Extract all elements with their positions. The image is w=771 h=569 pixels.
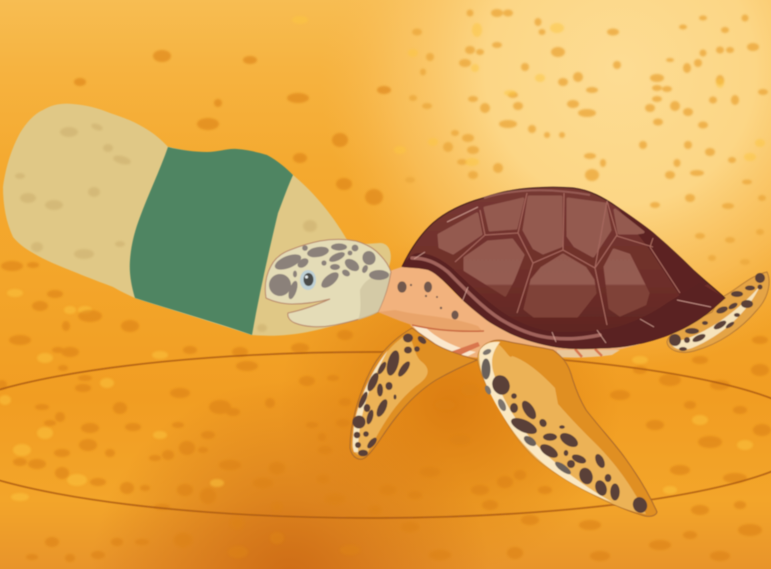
plastic bottle <box>3 104 391 336</box>
head shading <box>358 273 390 320</box>
sea turtle <box>265 187 769 516</box>
front right flipper <box>478 340 657 516</box>
rear flipper <box>667 272 769 352</box>
bottle faint blotches showing through <box>15 122 317 332</box>
eye <box>300 270 316 290</box>
neck skin <box>378 267 490 331</box>
scutes: shell plates <box>439 197 648 316</box>
seams between scutes <box>455 193 680 325</box>
ground ring: large ellipse line on the sand <box>0 352 771 518</box>
shell top highlight <box>484 190 590 198</box>
front left flipper <box>350 328 477 459</box>
rim highlight ticks <box>414 207 711 343</box>
shell carapace <box>402 187 725 349</box>
bottle label: green band <box>130 147 293 335</box>
head <box>265 240 391 327</box>
shell base <box>402 187 725 349</box>
belly plastron <box>410 320 640 359</box>
neck spots <box>397 281 459 320</box>
head spots <box>267 243 389 300</box>
background blotches: upper right amber speckles <box>405 9 768 265</box>
bottle body: translucent tan plastic <box>3 104 391 336</box>
shell upper right darker area <box>617 207 708 296</box>
shell rim <box>402 253 725 349</box>
rim highlight band <box>412 258 600 339</box>
